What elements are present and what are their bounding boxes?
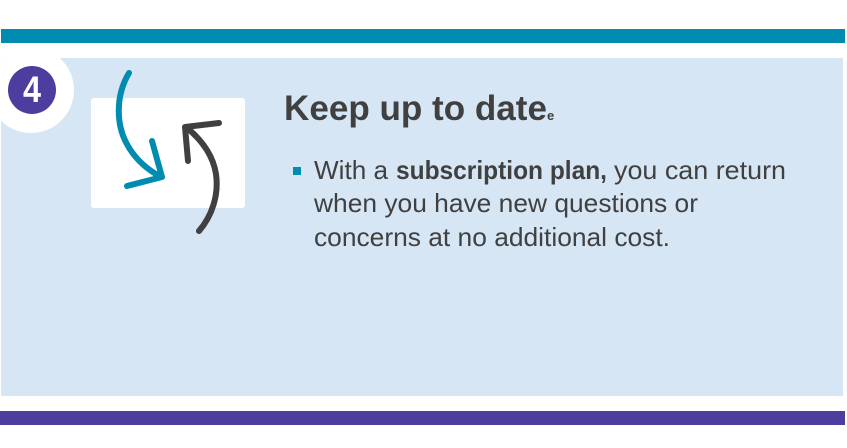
- body text: With a: [314, 155, 389, 185]
- heading: Keep up to date: [284, 89, 547, 128]
- bottom purple bar: [0, 411, 845, 425]
- heading: e: [547, 108, 554, 123]
- body text: you can return: [614, 155, 786, 185]
- step number badge: [0, 47, 74, 133]
- bullet marker: [293, 167, 301, 175]
- body text: [313, 155, 786, 252]
- body text: subscription plan,: [396, 155, 607, 185]
- step number badge: 4: [23, 69, 41, 110]
- body text: when you have new questions or: [313, 188, 698, 218]
- panel: step 4 background: [1, 58, 843, 396]
- body text: concerns at no additional cost.: [314, 222, 670, 252]
- top teal bar: [1, 29, 845, 43]
- icon: exchange arrows on white card: [91, 73, 245, 231]
- icon: dark arrow: [185, 123, 219, 231]
- icon: teal arrow: [119, 73, 162, 186]
